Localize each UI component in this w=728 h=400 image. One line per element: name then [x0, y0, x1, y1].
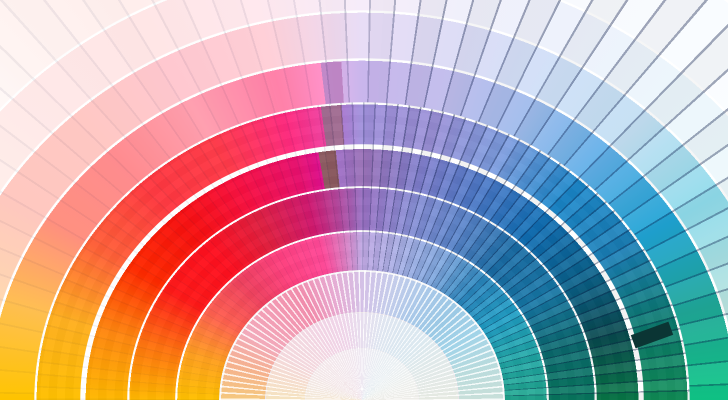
swatch ring 3: mid band	[175, 230, 549, 400]
swatch ring 0: near-white hub	[305, 348, 419, 400]
swatch ring 2: light inner band	[219, 270, 505, 400]
swatch ring 9: palest tints	[0, 0, 728, 196]
swatch ring 6: bright band	[34, 102, 690, 400]
swatch: dark teal chip	[631, 322, 673, 348]
swatch ring 10: outer white tips	[0, 0, 728, 112]
swatch ring 1: pale inner band	[265, 312, 459, 400]
swatch ring 5: saturated band inside main white arc	[80, 144, 644, 400]
swatch ring 8: pale tints	[0, 10, 728, 323]
swatch ring 4: deep band	[127, 186, 597, 400]
